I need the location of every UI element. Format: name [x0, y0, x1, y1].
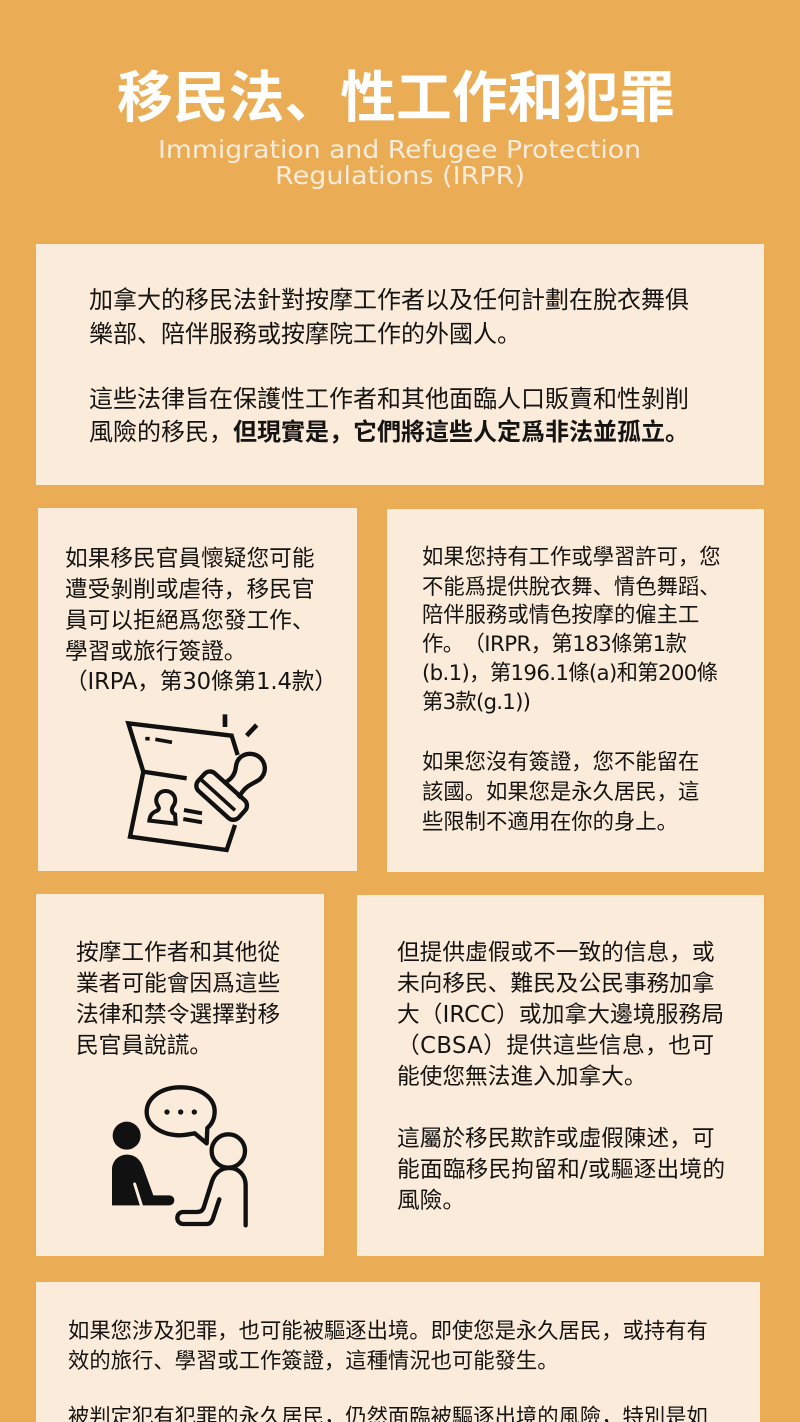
panel: work and study permits: 如果您沒有簽證，您不能留在: [422, 750, 699, 775]
panel: lying to officers: 業者可能會因爲這些: [76, 971, 280, 997]
panel: introduction: 風險的移民，但現實是，它們將這些人定爲非法並孤立。: [89, 418, 689, 446]
panel: lying to officers: [36, 894, 324, 1256]
panel: introduction: 這些法律旨在保護性工作者和其他面臨人口販賣和性剝削: [89, 385, 689, 413]
panel: visa refusal: [38, 508, 357, 871]
panel: lying to officers: 法律和禁令選擇對移: [76, 1002, 280, 1028]
panel: work and study permits: 不能爲提供脫衣舞、情色舞蹈、: [422, 575, 721, 600]
subtitle: [158, 135, 641, 190]
panel: false information: 未向移民、難民及公民事務加拿: [397, 970, 715, 997]
panel: visa refusal: 學習或旅行簽證。: [65, 639, 246, 665]
panel: lying to officers: 民官員說謊。: [76, 1033, 212, 1059]
panel: introduction: 樂部、陪伴服務或按摩院工作的外國人。: [89, 320, 521, 348]
panel: crime and deportation: 效的旅行、學習或工作簽證，這種情況也可能發生。: [68, 1349, 559, 1374]
panel: false information: 但提供虛假或不一致的信息，或: [397, 940, 715, 966]
panel: work and study permits: (b.1)，第196.1條(a)和第200條: [422, 661, 718, 686]
panel: false information: 風險。: [397, 1188, 465, 1214]
panel: false information: 能面臨移民拘留和/或驅逐出境的: [397, 1157, 725, 1183]
panel: work and study permits: 些限制不適用在你的身上。: [422, 810, 678, 835]
panel: work and study permits: 第3款(g.1)): [422, 690, 531, 715]
subtitle: Immigration and Refugee Protection: [158, 135, 641, 164]
panel: introduction: 加拿大的移民法針對按摩工作者以及任何計劃在脫衣舞俱: [89, 286, 689, 314]
panel: visa refusal: 遭受剝削或虐待，移民官: [65, 577, 315, 603]
panel: visa refusal: 如果移民官員懷疑您可能: [65, 546, 315, 572]
panel: false information: 大（IRCC）或加拿大邊境服務局: [397, 1001, 724, 1028]
panel: false information: [357, 895, 764, 1256]
panel: false information: 能使您無法進入加拿大。: [397, 1063, 647, 1090]
panel: false information: （CBSA）提供這些信息，也可: [397, 1033, 714, 1059]
panel: work and study permits: 該國。如果您是永久居民，這: [422, 780, 699, 805]
panel: crime and deportation: [36, 1282, 760, 1422]
icon: passport and stamp: [128, 714, 265, 850]
title: 移民法、性工作和犯罪: [117, 66, 675, 131]
panel: visa refusal: 員可以拒絕爲您發工作、: [65, 608, 315, 634]
panel: work and study permits: 作。（IRPR，第183條第1款: [422, 632, 687, 657]
panel: crime and deportation: 如果您涉及犯罪，也可能被驅逐出境。即使您是永久居民，或持有有: [68, 1319, 708, 1344]
panel: false information: 這屬於移民欺詐或虛假陳述，可: [397, 1126, 715, 1152]
panel: work and study permits: 陪伴服務或情色按摩的僱主工: [422, 603, 699, 628]
icon: two people talking: [112, 1087, 246, 1225]
panel: visa refusal: （IRPA，第30條第1.4款）: [65, 669, 337, 695]
panel: lying to officers: 按摩工作者和其他從: [76, 940, 280, 966]
subtitle: Regulations (IRPR): [275, 161, 525, 190]
panel: work and study permits: 如果您持有工作或學習許可，您: [422, 545, 721, 570]
panel: work and study permits: [387, 509, 764, 872]
panel: introduction: [36, 244, 764, 485]
